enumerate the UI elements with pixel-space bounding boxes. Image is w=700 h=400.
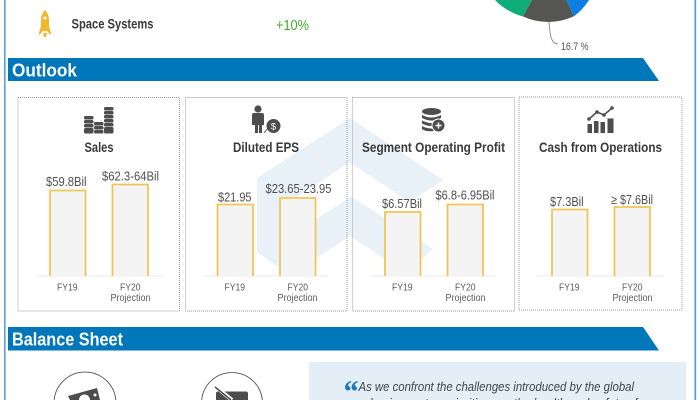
label: FY19: FY19	[392, 282, 413, 294]
panel: Sales	[18, 98, 180, 311]
panel: Cash from Operations	[519, 97, 682, 310]
callout: quote	[309, 362, 686, 400]
bar: FY20	[614, 207, 650, 276]
value: FY19: $7.3Bil	[550, 194, 584, 209]
bar: FY20	[112, 184, 148, 276]
leader line	[549, 22, 558, 44]
label: FY20 Projection	[612, 282, 653, 304]
label: FY20 Projection: Projection	[612, 292, 653, 304]
label: FY20 Projection: FY20	[120, 282, 141, 294]
pie label: 16.7 %: 16.7 %	[561, 41, 589, 53]
value: FY20: $62.3-64Bil	[102, 169, 159, 184]
label: FY20 Projection: FY20	[622, 282, 643, 294]
icon: rocket	[39, 10, 51, 37]
slice: blue	[566, 0, 589, 16]
section heading: Balance Sheet: Balance Sheet	[12, 329, 123, 350]
row: space systems	[39, 10, 309, 37]
label: FY19: FY19	[57, 282, 78, 294]
baseline	[36, 276, 162, 277]
quote text line 1: As we confront the challenges introduced by the global	[358, 379, 635, 394]
label: FY20 Projection	[278, 282, 318, 304]
card with slash	[215, 387, 248, 400]
panel: Diluted EPS	[186, 98, 347, 311]
heading: Cash from Operations: Cash from Operations	[539, 139, 662, 155]
label: Space Systems: Space Systems	[72, 16, 154, 32]
slice: gray	[523, 0, 574, 22]
value: +10%: +10%	[276, 18, 309, 34]
label: FY20 Projection	[446, 282, 486, 304]
label: FY19: FY19	[224, 282, 245, 294]
bar: FY19	[385, 212, 420, 276]
baseline	[537, 276, 664, 277]
label: FY20 Projection: FY20	[455, 282, 476, 294]
bar: FY20	[280, 198, 316, 276]
heading: Sales: Sales	[84, 139, 114, 155]
icon: cash circle	[54, 372, 116, 400]
icon: database with plus	[422, 108, 445, 132]
icon: no debt card circle	[202, 373, 262, 400]
icon: person with dollar coin: $	[271, 122, 277, 132]
label: FY20 Projection: Projection	[110, 292, 151, 304]
heading: Segment Operating Profit: Segment Operating Profit	[362, 139, 505, 155]
label: FY19: FY19	[559, 282, 580, 294]
icon: coin stacks	[84, 107, 114, 134]
value: FY20: $6.8-6.95Bil	[436, 188, 495, 202]
value: FY19: $6.57Bil	[382, 196, 422, 211]
value: FY20: ≥ $7.6Bil	[611, 192, 653, 207]
panel: Segment Operating Profit	[352, 98, 514, 311]
slice: green	[495, 0, 532, 16]
section heading: Balance Sheet	[8, 327, 659, 350]
section heading: Outlook: Outlook	[12, 60, 78, 80]
bar: FY19	[552, 210, 588, 276]
section heading: Outlook	[8, 58, 659, 81]
label: FY20 Projection: Projection	[278, 292, 318, 304]
label: FY20 Projection: Projection	[446, 292, 486, 304]
value: FY19: $59.8Bil	[46, 174, 87, 189]
pie chart	[495, 0, 589, 53]
value: FY20: $23.65-23.95	[266, 181, 332, 196]
icon: bar chart with trend line	[587, 106, 614, 133]
baseline	[203, 276, 329, 277]
bar: FY19	[218, 204, 253, 276]
label: FY20 Projection: FY20	[288, 282, 308, 294]
cash bill	[68, 388, 100, 400]
label: FY20 Projection	[110, 282, 151, 304]
bar: FY20	[448, 204, 483, 276]
icon: person with dollar coin	[252, 105, 280, 133]
heading: Diluted EPS: Diluted EPS	[233, 139, 299, 155]
value: FY19: $21.95	[218, 190, 252, 204]
baseline	[370, 276, 496, 277]
bar: FY19	[50, 190, 86, 276]
watermark chevrons	[257, 118, 443, 275]
